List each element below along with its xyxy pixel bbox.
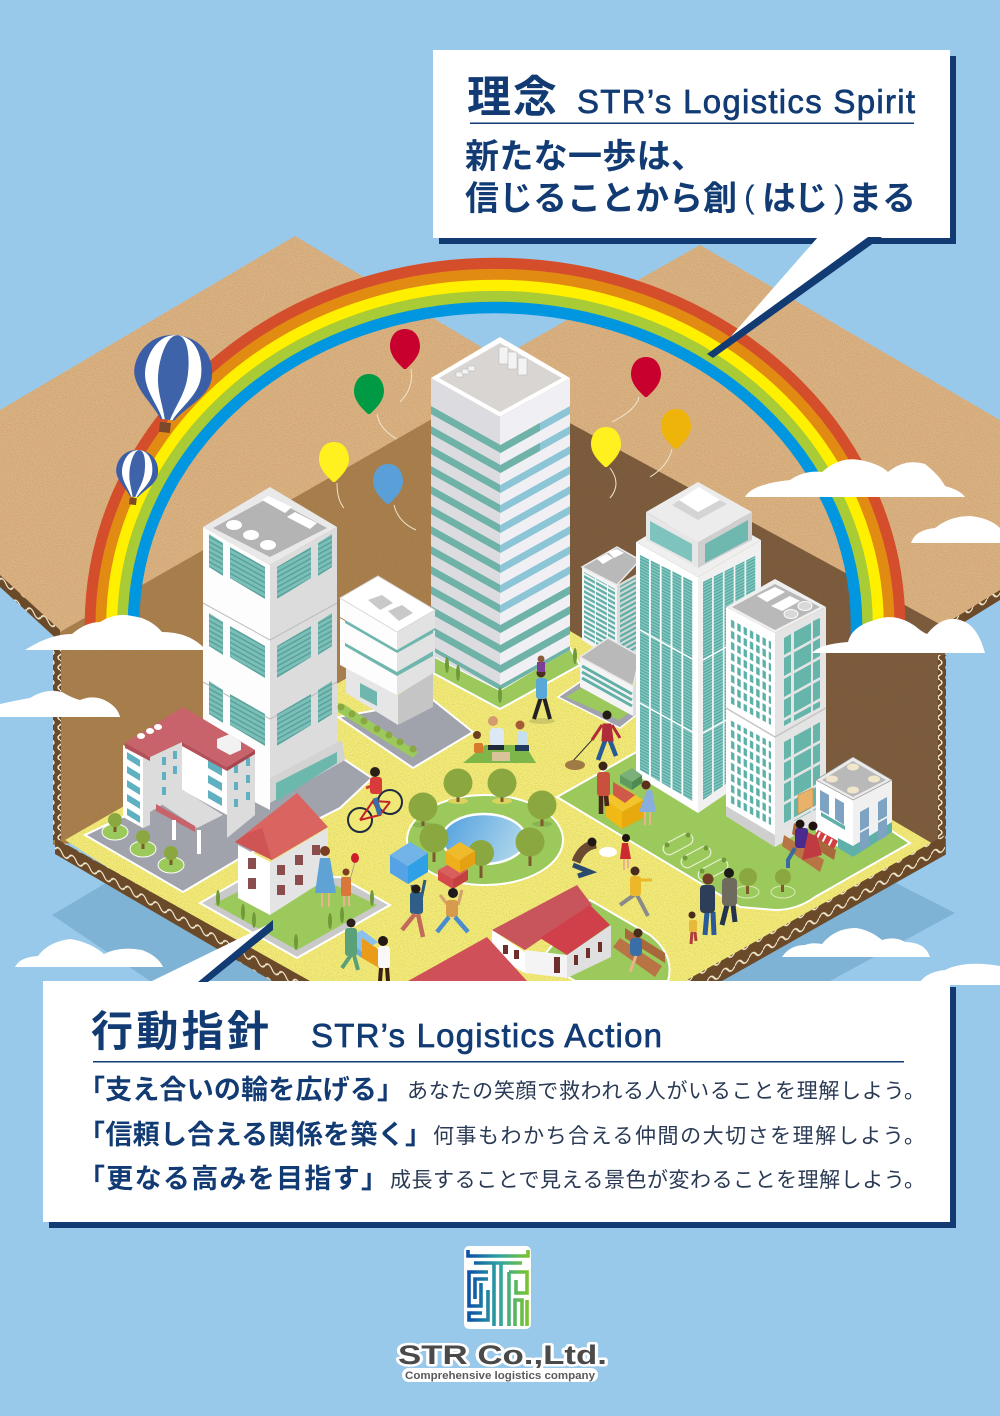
man at boxes	[597, 762, 610, 814]
action rule	[93, 1061, 904, 1062]
plaza hotel	[85, 758, 372, 892]
jumping man	[402, 880, 425, 937]
motto: 信じることから創	[465, 180, 737, 218]
right face	[698, 540, 761, 813]
right wall edge	[938, 655, 946, 840]
action row 3: 成長することで見える景色が変わることを理解しよう。	[390, 1169, 925, 1192]
runner in yellow	[620, 866, 652, 916]
mid white building	[340, 576, 435, 725]
cap left	[646, 512, 698, 568]
logo company name: STR Co.,Ltd.	[398, 1340, 607, 1370]
motto: (	[744, 179, 755, 215]
man with child on shoulders	[529, 656, 555, 724]
floor edge left	[55, 838, 310, 981]
shoulder roof	[636, 505, 761, 577]
motto	[465, 138, 916, 218]
callout: action guidelines	[43, 920, 956, 1228]
floor edge right	[685, 835, 945, 981]
right flap scalloped edge	[945, 590, 1000, 634]
action row 2	[78, 1120, 925, 1150]
rainbow	[90, 264, 900, 640]
left face	[726, 607, 775, 847]
action row 2: 何事もわかち合える仲間の大切さを理解しよう。	[433, 1125, 925, 1148]
blue cube	[390, 842, 428, 884]
left face	[636, 542, 698, 813]
sign board	[798, 788, 813, 814]
heading	[467, 73, 915, 122]
bottom right red house	[492, 885, 611, 978]
carrier in green	[342, 918, 358, 970]
cap right	[698, 512, 752, 568]
cyclist	[348, 767, 402, 832]
central lawn	[407, 795, 563, 885]
right face	[775, 607, 826, 847]
motto: )	[834, 179, 845, 215]
cloud: lower left	[15, 939, 163, 967]
logo	[398, 1246, 607, 1382]
cloud: left	[0, 691, 120, 717]
picnic family	[473, 716, 529, 761]
right flap	[500, 245, 1000, 627]
windows floor 3	[209, 681, 332, 746]
right inner wall	[500, 372, 946, 855]
floor	[65, 590, 935, 981]
top slab	[340, 598, 397, 650]
callout shadow	[439, 56, 956, 244]
red roof house	[235, 793, 328, 915]
orange balloon right	[650, 409, 691, 477]
action heading	[91, 1008, 662, 1055]
red balloon right	[612, 357, 661, 422]
roof	[203, 487, 337, 565]
woman on bench	[613, 928, 665, 977]
heading rule	[470, 122, 914, 124]
cubes	[347, 768, 643, 968]
action row 1: 「支え合いの輪を広げる」	[78, 1075, 404, 1105]
tower lawn	[431, 648, 580, 709]
logo mark	[464, 1246, 531, 1329]
green balloon	[354, 374, 397, 439]
garden planters	[661, 831, 730, 883]
callout: philosophy	[433, 50, 956, 358]
red balloon	[390, 329, 420, 402]
green area right	[557, 750, 910, 910]
people	[315, 656, 836, 981]
cardboard box	[0, 236, 1000, 855]
cloud: left behind buildings	[25, 615, 206, 650]
red carried cube	[438, 862, 468, 889]
yellow carried cube	[446, 842, 475, 873]
red roof house plot	[200, 877, 390, 958]
park trees	[408, 768, 795, 898]
hotel roof	[125, 707, 255, 767]
couple walking	[700, 868, 737, 935]
green cube	[620, 768, 642, 790]
shop building	[812, 757, 892, 857]
pond	[442, 814, 526, 864]
podium	[270, 740, 345, 803]
yellow balloon right	[591, 427, 621, 498]
slab upper	[340, 618, 397, 672]
cap top	[646, 482, 752, 542]
action heading: STR’s Logistics Action	[311, 1017, 662, 1054]
left inner wall	[53, 372, 500, 845]
left face	[203, 527, 270, 810]
box shadow left	[52, 883, 273, 981]
callout tail	[712, 237, 880, 358]
heading: STR’s Logistics Spirit	[577, 83, 915, 120]
cloud: bottom right	[918, 964, 1000, 985]
cloud: lower right	[782, 928, 930, 957]
action row 1	[78, 1075, 925, 1105]
yellow base cube	[604, 788, 643, 829]
motto: はじ	[762, 180, 828, 218]
cloud: upper right	[745, 459, 965, 497]
left white tower	[203, 487, 345, 810]
central striped tower	[431, 337, 570, 690]
bottom red roof house	[408, 937, 527, 981]
pair carried cube	[347, 930, 379, 968]
left flap scalloped edge	[0, 575, 60, 642]
shorter white tower right	[726, 579, 826, 847]
balloons	[319, 329, 691, 530]
girl in red dress	[620, 834, 631, 870]
windows floor 2	[209, 613, 332, 678]
girl in blue dress	[639, 780, 656, 825]
left face	[431, 378, 500, 690]
logo tagline: Comprehensive logistics company	[405, 1370, 596, 1382]
callout box	[433, 50, 950, 238]
action box	[43, 981, 950, 1222]
action heading: 行動指針	[91, 1008, 269, 1055]
left flap	[0, 236, 500, 632]
action row 3	[78, 1164, 925, 1194]
box shadow right	[722, 880, 955, 981]
slab lower	[340, 640, 397, 695]
red cube	[613, 782, 635, 803]
roof units	[456, 347, 527, 377]
tall teal tower right	[636, 482, 761, 813]
background right building	[582, 547, 640, 662]
action row 2: 「信頼し合える関係を築く」	[78, 1120, 432, 1150]
back plot	[558, 682, 640, 728]
roof	[431, 337, 570, 417]
right face	[500, 378, 570, 690]
crouching man with dog	[573, 838, 617, 876]
blue balloon	[373, 464, 416, 530]
cloud: mid-right over tower	[812, 617, 985, 653]
hedge trees	[338, 704, 416, 752]
hot air balloon small	[112, 448, 161, 507]
cloud: far right	[911, 516, 1000, 543]
motto: 新たな一歩は、	[465, 138, 705, 176]
roof	[726, 579, 826, 633]
action shadow	[49, 987, 956, 1228]
front low building	[580, 638, 640, 716]
bench couple	[782, 820, 836, 872]
hedge strip	[338, 703, 418, 758]
floor lines	[203, 603, 337, 719]
jumping woman	[437, 888, 468, 932]
woman walking dog	[565, 710, 620, 770]
lower lawn	[540, 900, 670, 981]
hotel windows	[127, 751, 250, 823]
right face	[270, 527, 337, 785]
hotel planters	[102, 813, 184, 873]
action row 1: あなたの笑顔で救われる人がいることを理解しよう。	[407, 1080, 925, 1103]
hotel	[123, 707, 255, 854]
plaza mid building	[338, 700, 473, 768]
motto: まる	[848, 180, 916, 218]
woman in blue dress with child	[315, 846, 359, 907]
hotel canopy	[160, 790, 223, 828]
picnic mat	[463, 745, 536, 763]
base band	[726, 806, 775, 847]
left wall edge	[53, 650, 61, 840]
windows floor 1	[209, 534, 332, 599]
heading: 理念	[467, 73, 557, 122]
yellow balloon	[319, 442, 349, 508]
action tail	[150, 922, 273, 982]
action row 3: 「更なる高みを目指す」	[78, 1164, 388, 1194]
small hedges around plot	[216, 648, 577, 950]
hot air balloon large	[127, 331, 216, 437]
carrier in white	[378, 936, 390, 981]
child	[688, 912, 697, 944]
